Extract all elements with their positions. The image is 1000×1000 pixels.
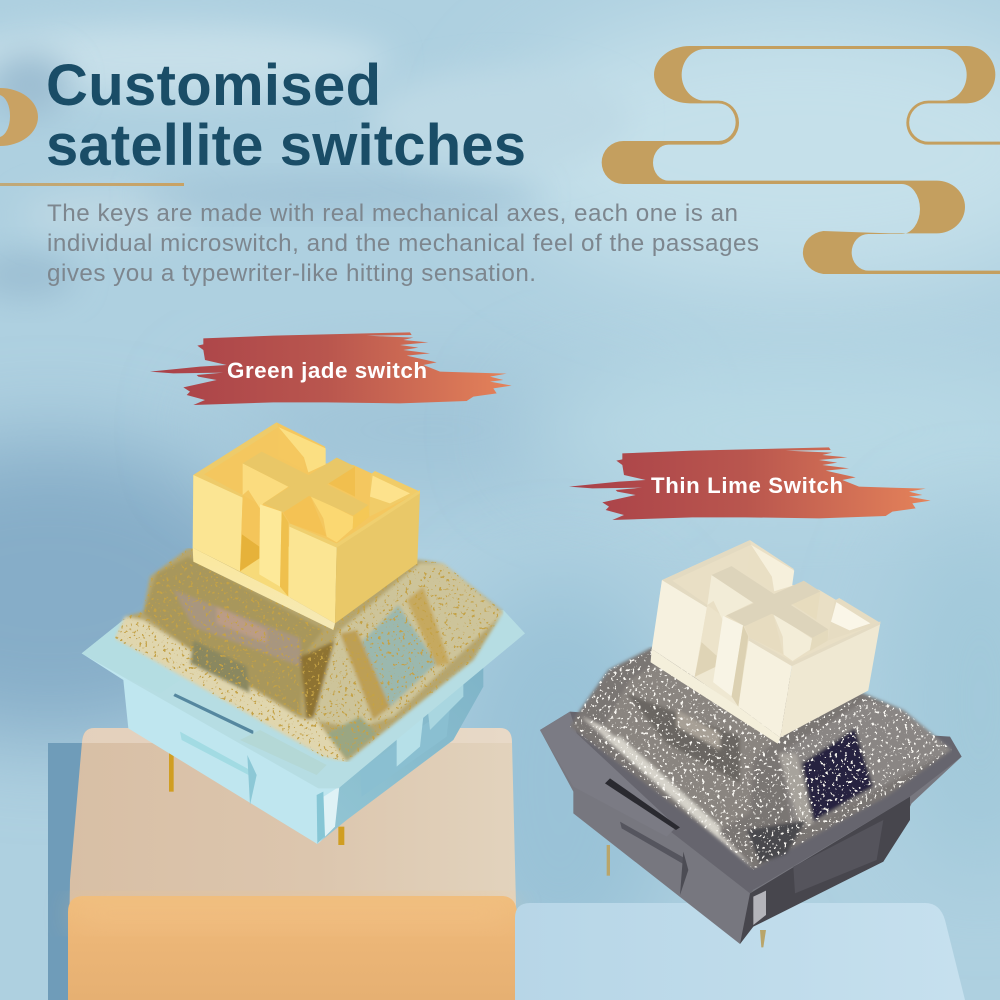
switch: thin lime: [540, 530, 962, 947]
clear top housing: [570, 647, 952, 869]
light blue pedestal: [515, 903, 965, 1000]
brush label: Green jade switch: Green jade switch: [227, 358, 427, 383]
gold pins: [169, 753, 344, 845]
description text: The keys are made with real mechanical axes, each one is an: [47, 200, 738, 227]
gold cloud ornament: [602, 46, 1000, 274]
grey housing: [540, 712, 962, 944]
description text: individual microswitch, and the mechanical feel of the passages: [47, 230, 759, 257]
yellow stem: [193, 422, 420, 630]
brush label: Thin Lime Switch: [569, 447, 931, 520]
switch: green jade: [82, 422, 525, 845]
title: Customised: [46, 53, 381, 118]
blue housing: [82, 610, 525, 844]
brush label: Thin Lime Switch: Thin Lime Switch: [651, 473, 843, 498]
pins: [607, 845, 766, 947]
title: [46, 53, 526, 178]
decorative gold crescent: [0, 88, 38, 146]
cream stem: [641, 530, 889, 754]
description text: gives you a typewriter-like hitting sensation.: [47, 260, 536, 287]
gold underline: [0, 183, 184, 186]
clear gold top housing: [115, 548, 503, 762]
title: satellite switches: [46, 113, 526, 178]
brush label: Green jade switch: [150, 332, 512, 405]
description text: [47, 200, 759, 287]
orange pedestal: [48, 728, 517, 1000]
